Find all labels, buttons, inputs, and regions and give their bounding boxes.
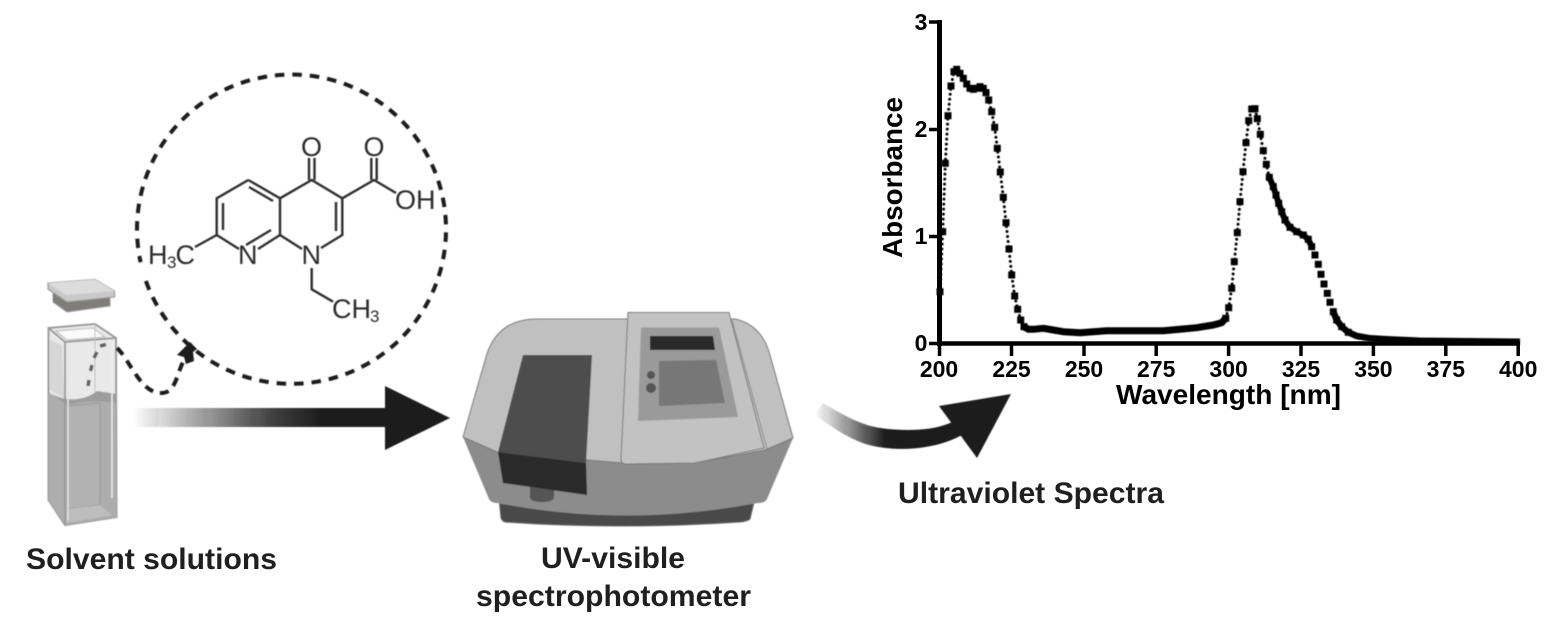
data series	[940, 69, 1520, 344]
dashed path from cuvette to molecule	[117, 342, 197, 393]
cuvette lid	[48, 280, 114, 312]
icon: small arrowhead	[177, 342, 197, 364]
heading: spectrophotometer: spectrophotometer	[476, 580, 751, 613]
atom labels: 3	[370, 307, 379, 326]
atom labels: O	[364, 132, 385, 162]
heading: solvent solutions: Solvent solutions	[26, 543, 277, 576]
atom labels: C	[176, 240, 195, 270]
x-axis tick labels: 400	[1499, 356, 1537, 382]
chart: absorbance spectrum	[877, 9, 1537, 410]
y-axis title: Absorbance	[877, 97, 908, 258]
x-axis tick labels: 200	[920, 356, 958, 382]
atom labels: N	[238, 240, 258, 270]
atom labels: O	[301, 132, 322, 162]
base	[499, 498, 755, 526]
sample compartment	[498, 355, 592, 463]
x-axis tick labels: 350	[1354, 356, 1393, 382]
curved arrow to spectra	[815, 394, 1011, 458]
atom labels	[148, 132, 436, 326]
x-axis title: Wavelength [nm]	[1116, 379, 1341, 410]
x-axis tick labels: 225	[992, 356, 1031, 382]
heading: spectrophotometer: UV-visible	[541, 542, 685, 575]
top housing	[463, 319, 793, 463]
front housing	[463, 437, 793, 516]
atom labels: N	[302, 240, 321, 270]
arrow: cuvette to spectrophotometer	[133, 386, 450, 450]
y-axis tick labels: 0	[915, 330, 927, 356]
x-axis tick labels: 375	[1427, 356, 1465, 382]
dashed circle callout	[137, 75, 446, 384]
atom labels: CH	[332, 294, 371, 324]
x-axis tick labels: 275	[1137, 356, 1176, 382]
y-axis tick labels: 2	[915, 116, 927, 142]
y-axis tick labels: 3	[915, 9, 927, 35]
atom labels: H	[148, 240, 168, 270]
x-axis tick labels: 325	[1282, 356, 1320, 382]
atom labels: OH	[395, 185, 436, 215]
icon: cuvette with lid	[48, 280, 116, 525]
atom labels: 3	[167, 253, 176, 272]
y-axis tick labels: 1	[915, 223, 928, 249]
x-axis tick labels	[920, 356, 1537, 382]
cuvette body	[48, 324, 116, 525]
axes and ticks	[929, 20, 1520, 356]
knob	[530, 487, 554, 502]
dashed line inside cuvette	[88, 344, 106, 386]
heading: spectrophotometer	[476, 542, 751, 613]
y-axis tick labels	[915, 9, 928, 356]
x-axis tick labels: 250	[1065, 356, 1103, 382]
heading: ultraviolet spectra: Ultraviolet Spectra	[898, 477, 1164, 510]
x-axis tick labels: 300	[1209, 356, 1248, 382]
control panel	[621, 312, 764, 464]
icon: UV-visible spectrophotometer	[463, 312, 793, 526]
chemical structure: nalidixic acid	[148, 132, 436, 326]
